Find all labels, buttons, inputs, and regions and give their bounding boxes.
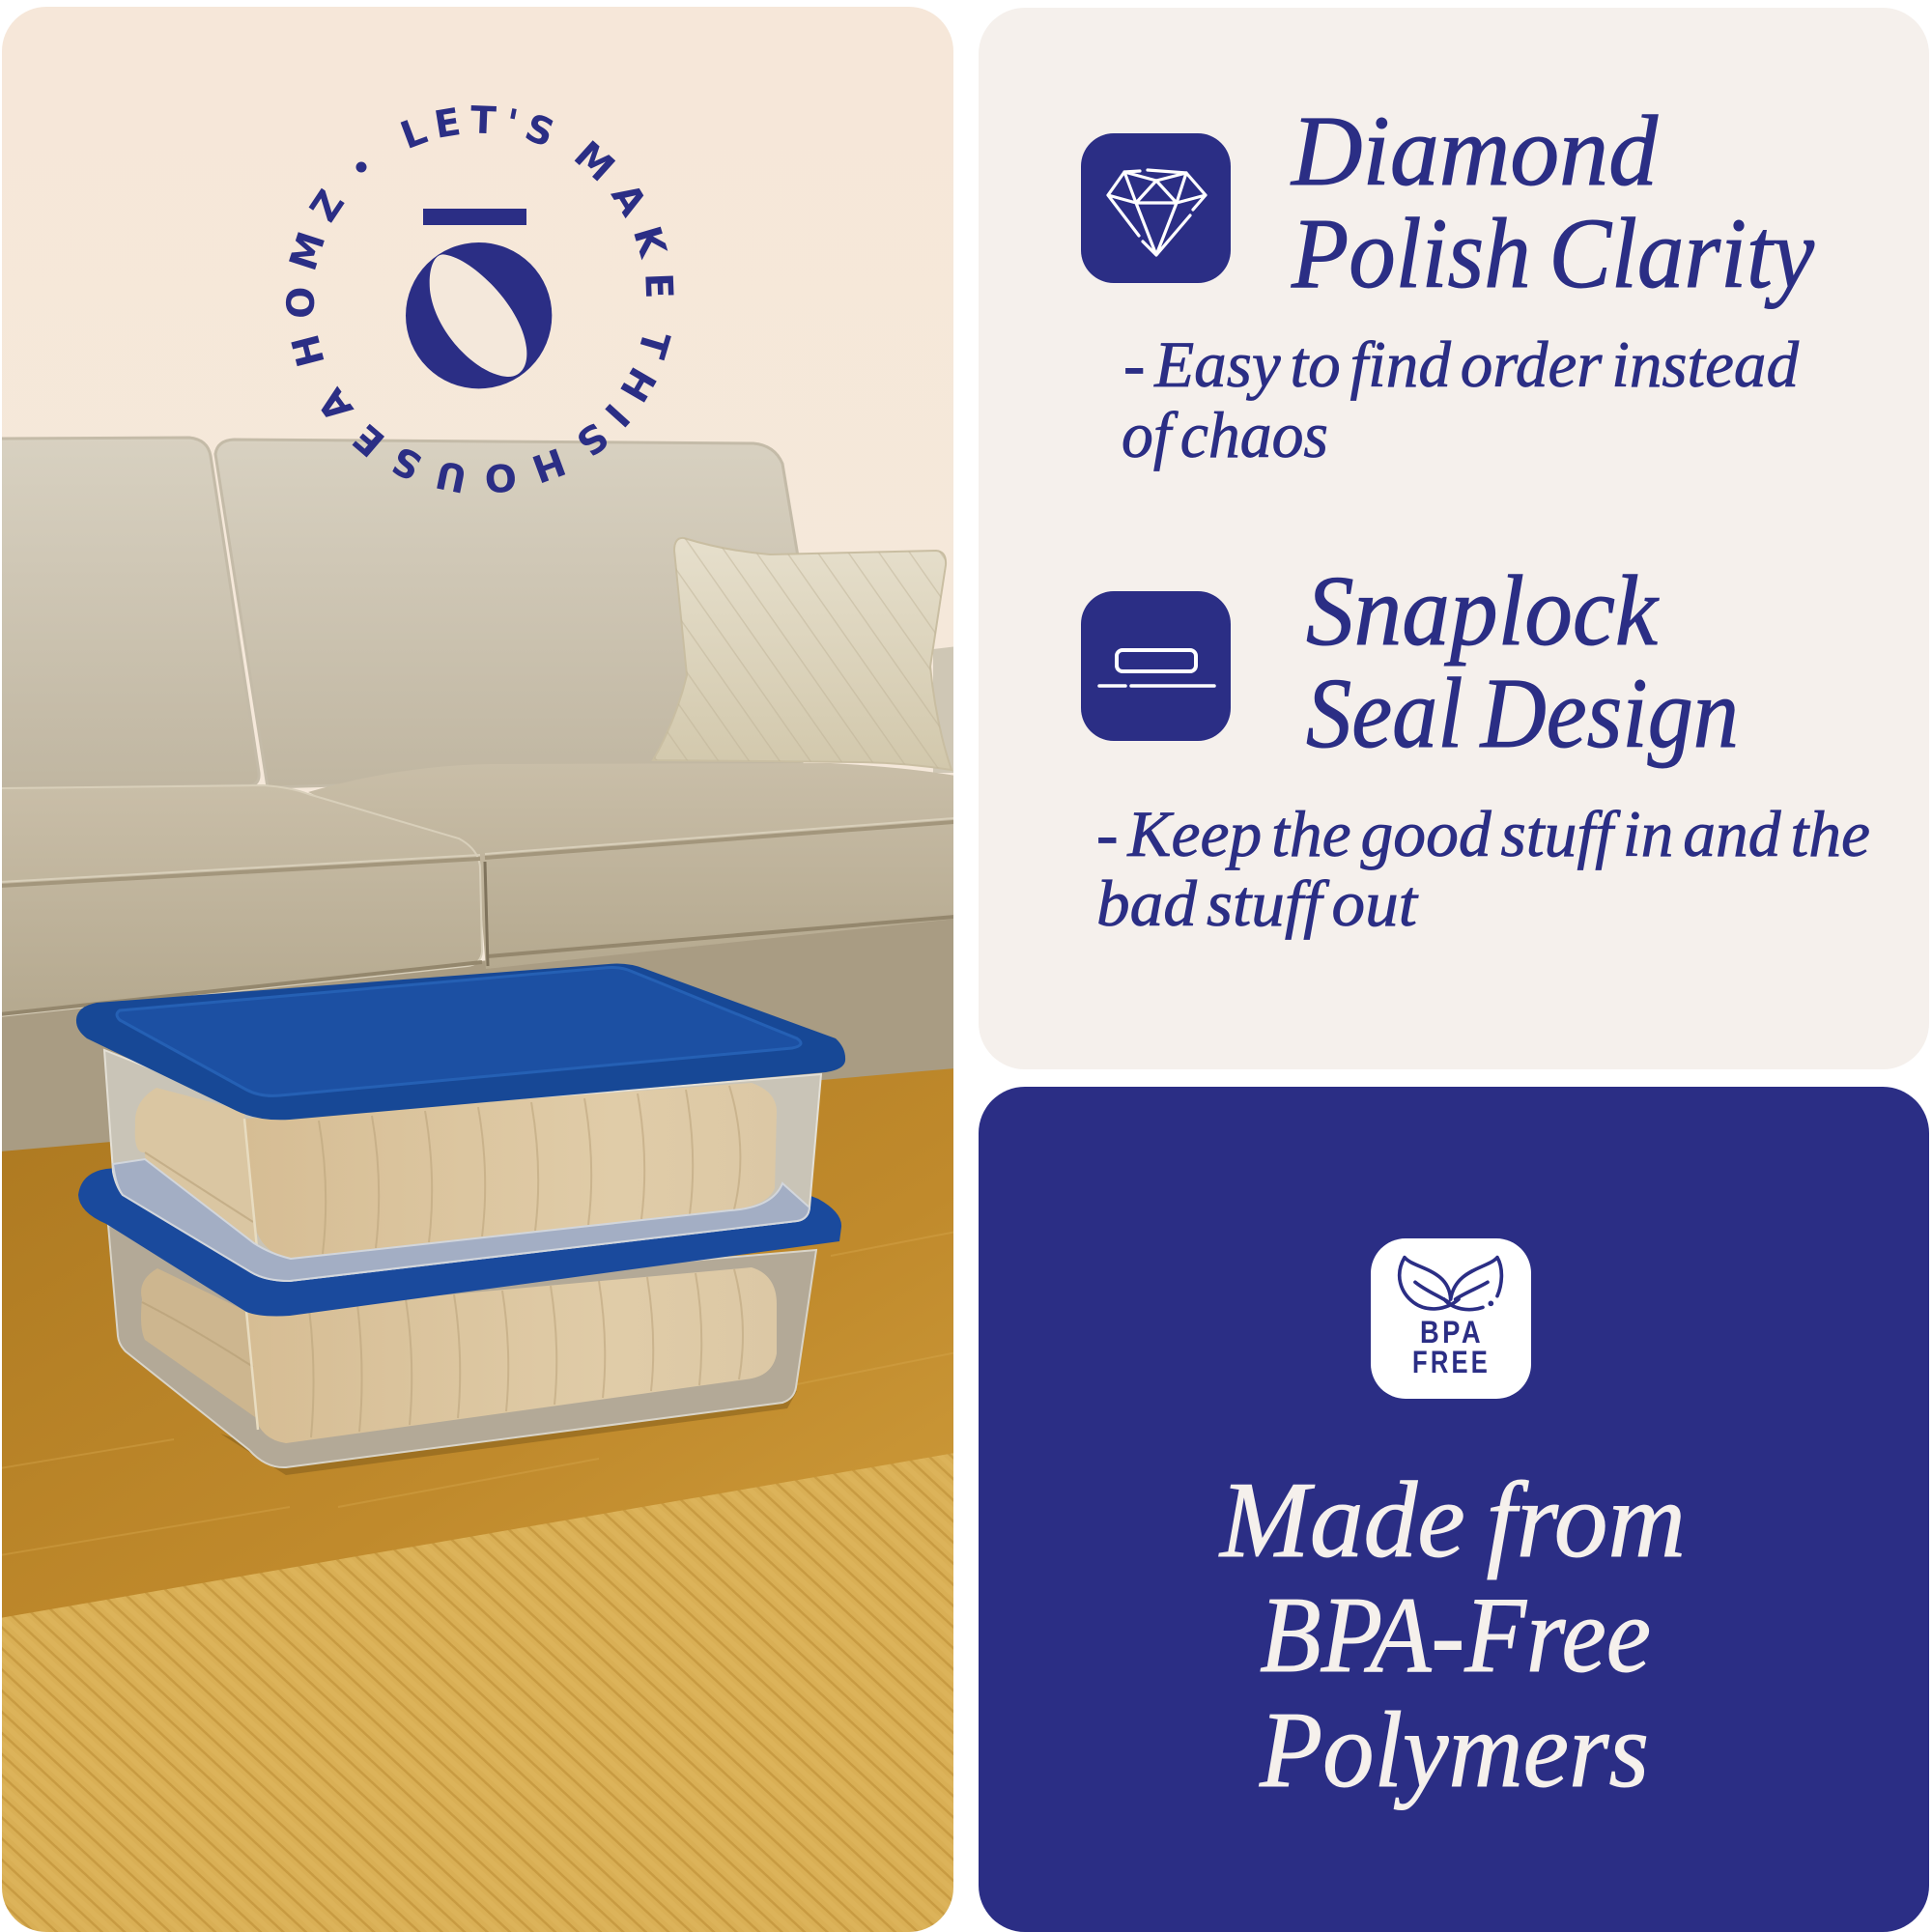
- slogan word: HOMZ: HOMZ: [286, 187, 345, 367]
- panel: room photo: [2, 7, 953, 1932]
- heading: Diamond Polish Clarity: Diamond: [1290, 96, 1659, 207]
- heading: Made from BPA-Free Polymers: BPA-Free: [1260, 1576, 1651, 1695]
- circular slogan: [286, 105, 674, 493]
- heading: Snaplock Seal Design: Seal Design: [1306, 658, 1739, 769]
- text: diamond description: - Easy to find order instead: [1123, 327, 1800, 401]
- bottom box body: [108, 1225, 816, 1467]
- logo macron bar: [423, 209, 526, 225]
- slogan word: MAKE: MAKE: [574, 140, 674, 297]
- bottom box lid: [78, 1169, 842, 1316]
- stacked storage boxes: [76, 964, 845, 1467]
- right seat cushion: [308, 763, 966, 969]
- slogan word: A: A: [321, 386, 355, 417]
- sofa: [0, 438, 966, 1151]
- slogan word: THIS: THIS: [579, 334, 671, 456]
- floor shadow under boxes: [220, 1391, 797, 1475]
- top box translucent base: [113, 1159, 810, 1281]
- right back cushion: [215, 440, 802, 787]
- text: snaplock description: [1096, 797, 1870, 940]
- sofa base: [0, 913, 966, 1151]
- text: snaplock description: - Keep the good stuff in and the: [1096, 797, 1870, 870]
- text: snaplock description: bad stuff out: [1096, 867, 1419, 940]
- icon: diamond: [1081, 133, 1231, 283]
- slogan word: HOUSE: HOUSE: [352, 423, 566, 493]
- icon: BPA free badge: BPA: [1420, 1315, 1484, 1350]
- top blanket: [135, 1083, 777, 1259]
- text: diamond description: [1122, 327, 1800, 471]
- heading: Diamond Polish Clarity: [1290, 96, 1815, 309]
- icon: BPA free badge: FREE: [1412, 1345, 1491, 1379]
- rug: [0, 1451, 966, 1932]
- bottom blanket: [141, 1267, 777, 1443]
- logo mark: [406, 209, 552, 388]
- pillow: [653, 538, 952, 770]
- logo ring: [406, 242, 552, 388]
- panel: BPA free: [979, 1087, 1929, 1932]
- heading: Made from BPA-Free Polymers: Made from: [1218, 1461, 1686, 1580]
- panel: product features: [979, 8, 1929, 1069]
- text: diamond description: of chaos: [1122, 398, 1328, 471]
- top box lid: [76, 964, 845, 1120]
- floor: [0, 1063, 966, 1633]
- heading: Made from BPA-Free Polymers: [1218, 1461, 1686, 1810]
- left back cushion: [0, 438, 259, 789]
- wall: [2, 7, 953, 961]
- slogan dot: [355, 162, 367, 172]
- heading: Snaplock Seal Design: Snaplock: [1306, 555, 1660, 667]
- heading: Snaplock Seal Design: [1306, 555, 1739, 769]
- heading: Diamond Polish Clarity: Polish Clarity: [1291, 198, 1815, 309]
- slogan word: LET'S: LET'S: [400, 105, 553, 149]
- heading: Made from BPA-Free Polymers: Polymers: [1259, 1690, 1649, 1810]
- sofa arm: [933, 647, 953, 773]
- icon: BPA free badge: [1371, 1238, 1531, 1399]
- left seat cushion: [0, 785, 482, 1016]
- icon: snaplock seal: [1081, 591, 1231, 741]
- top box body: [104, 1050, 821, 1281]
